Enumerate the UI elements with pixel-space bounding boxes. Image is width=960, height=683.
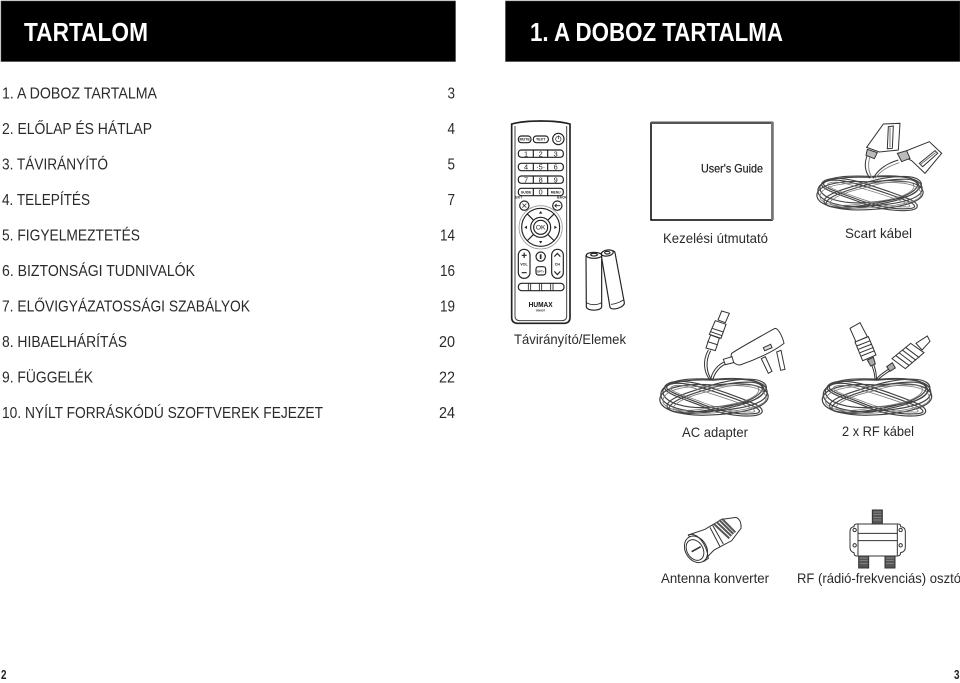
toc entry 10: 10. NYÍLT FORRÁSKÓDÚ SZOFTVEREK FEJEZET bbox=[2, 403, 323, 422]
toc entry 8: 20 bbox=[439, 334, 455, 351]
toc entry 4: 7 bbox=[448, 192, 455, 209]
icon: antenna converter bbox=[680, 517, 741, 567]
toc entry 3: 3. TÁVIRÁNYÍTÓ bbox=[2, 154, 108, 174]
number keypad: 9 bbox=[554, 175, 558, 184]
toc entry 1: 3 bbox=[448, 86, 455, 102]
volume, info, channel: VOL bbox=[520, 263, 529, 267]
icon: RF cables bbox=[822, 323, 932, 416]
HUMAX logo: RM-I07 bbox=[536, 308, 546, 312]
toc entry 9 bbox=[2, 368, 455, 386]
HUMAX logo bbox=[529, 300, 553, 312]
icon: user guide booklet bbox=[651, 122, 774, 220]
icon: remote control bbox=[512, 121, 570, 323]
toc entry 2: 2. ELŐLAP ÉS HÁTLAP bbox=[2, 119, 152, 138]
top buttons: MUTE bbox=[519, 138, 530, 142]
icon: batteries bbox=[586, 249, 624, 311]
icon: AC adapter bbox=[660, 311, 785, 416]
number keypad: 1 bbox=[524, 149, 528, 158]
exit and back: EXIT bbox=[515, 196, 522, 200]
toc entry 9: 22 bbox=[439, 370, 455, 386]
icon: RF splitter bbox=[850, 510, 905, 568]
toc entry 4 bbox=[2, 190, 455, 209]
toc entry 3 bbox=[2, 154, 455, 174]
number keypad bbox=[518, 149, 563, 197]
navigation wheel: OK bbox=[536, 225, 546, 232]
label: scart cable: Scart kábel bbox=[845, 225, 912, 241]
toc entry 10: 24 bbox=[439, 405, 455, 422]
header: 1. A DOBOZ TARTALMA: 1. A DOBOZ TARTALMA bbox=[530, 17, 783, 47]
toc entry 6 bbox=[2, 261, 455, 280]
HUMAX logo: HUMAX bbox=[529, 300, 553, 309]
toc entry 1 bbox=[2, 86, 455, 102]
toc entry 5: 14 bbox=[440, 228, 455, 244]
toc entry 4: 4. TELEPÍTÉS bbox=[2, 190, 90, 209]
label: RF cables: 2 x RF kábel bbox=[842, 423, 914, 439]
toc entry 3: 5 bbox=[448, 156, 455, 174]
number keypad: 3 bbox=[554, 149, 558, 158]
volume, info, channel: OPT+ bbox=[537, 269, 545, 273]
icon: scart cable bbox=[817, 123, 942, 211]
toc entry 8: 8. HIBAELHÁRÍTÁS bbox=[2, 332, 127, 351]
colour buttons bbox=[518, 283, 564, 291]
toc entry 5: 5. FIGYELMEZTETÉS bbox=[2, 226, 140, 244]
number keypad: GUIDE bbox=[521, 190, 532, 194]
label: remote and batteries: Távirányító/Elemek bbox=[514, 331, 627, 347]
number keypad: 8 bbox=[539, 175, 543, 184]
exit and back: BACK bbox=[557, 196, 567, 200]
toc entry 9: 9. FÜGGELÉK bbox=[2, 368, 93, 386]
volume, info, channel bbox=[518, 249, 563, 278]
toc entry 7: 7. ELŐVIGYÁZATOSSÁGI SZABÁLYOK bbox=[2, 296, 250, 316]
number keypad: ·5· bbox=[536, 163, 545, 172]
table of contents bbox=[2, 86, 455, 422]
toc entry 5 bbox=[2, 226, 455, 244]
toc entry 2: 4 bbox=[448, 121, 455, 138]
toc entry 1: 1. A DOBOZ TARTALMA bbox=[2, 86, 157, 102]
page number left: 2 bbox=[1, 667, 6, 682]
header: TARTALOM bbox=[1, 1, 456, 62]
volume, info, channel: CH bbox=[555, 263, 560, 267]
header: TARTALOM: TARTALOM bbox=[24, 17, 148, 47]
top buttons bbox=[518, 133, 564, 145]
number keypad: MENU bbox=[551, 190, 561, 194]
top buttons: TEXT bbox=[536, 138, 546, 142]
number keypad: 6 bbox=[554, 163, 558, 172]
label: user guide: Kezelési útmutató bbox=[663, 230, 768, 246]
header: 1. A DOBOZ TARTALMA bbox=[506, 1, 960, 62]
toc entry 2 bbox=[2, 119, 455, 138]
number keypad: 2 bbox=[539, 149, 543, 158]
icon: user guide booklet: User's Guide bbox=[701, 162, 763, 176]
label: AC adapter: AC adapter bbox=[682, 424, 748, 440]
number keypad: 7 bbox=[524, 175, 528, 184]
toc entry 7 bbox=[2, 296, 455, 316]
number keypad: 0 bbox=[539, 188, 543, 197]
navigation wheel bbox=[519, 206, 562, 249]
toc entry 7: 19 bbox=[440, 298, 455, 316]
toc entry 6: 6. BIZTONSÁGI TUDNIVALÓK bbox=[2, 261, 195, 280]
label: antenna converter: Antenna konverter bbox=[661, 570, 769, 586]
number keypad: 4 bbox=[524, 163, 528, 172]
toc entry 8 bbox=[2, 332, 455, 351]
exit and back bbox=[515, 196, 567, 210]
toc entry 6: 16 bbox=[440, 263, 455, 280]
